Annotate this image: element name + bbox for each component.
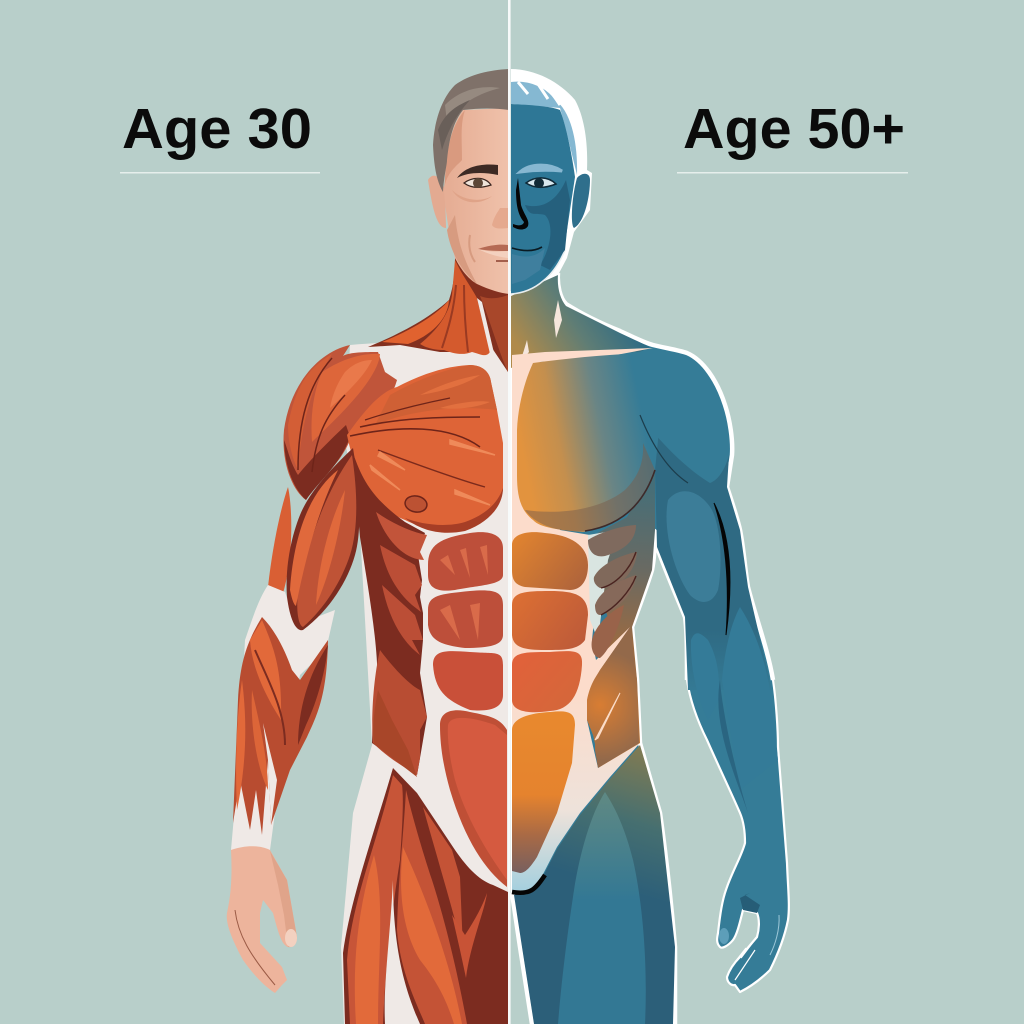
ab row 2 <box>428 590 503 648</box>
left under-eye shading <box>452 190 492 202</box>
right neck gradient <box>511 275 650 368</box>
right mouth line <box>512 247 542 251</box>
left cheek crease <box>469 235 475 262</box>
right ab row 3 <box>512 651 582 712</box>
right ear <box>572 174 590 228</box>
left face <box>444 108 509 294</box>
right ab row 4 <box>512 711 575 873</box>
right lower chest shadow <box>525 443 655 531</box>
left dark armpit and lat <box>352 450 427 775</box>
right lower oblique <box>587 627 639 768</box>
right eye <box>526 178 556 187</box>
right serratus muscles <box>588 525 637 658</box>
left neck muscles <box>368 258 508 372</box>
light fascia between serratus <box>588 530 618 640</box>
right half: blue figure <box>511 273 789 1024</box>
right hair <box>511 82 577 175</box>
ab row 3 <box>433 651 503 710</box>
right pectoral crease <box>585 470 655 531</box>
left rectus abdominis <box>428 532 507 887</box>
left half: anatomical muscle figure <box>227 258 508 1024</box>
center divider line <box>508 0 511 1024</box>
left head <box>428 69 509 294</box>
right thigh highlight <box>558 792 646 1024</box>
right head white outline <box>511 69 592 296</box>
left eye <box>464 178 491 187</box>
right arm and lat shade <box>633 407 772 690</box>
right eyebrow <box>520 165 562 172</box>
right abdomen <box>512 525 639 893</box>
left deltoid <box>284 345 397 500</box>
right neck slivers <box>520 300 562 362</box>
left serratus and oblique <box>372 512 427 777</box>
right chest <box>517 353 660 532</box>
right ab row 2 <box>512 591 588 650</box>
right hand details <box>740 893 760 913</box>
right head <box>511 69 592 296</box>
left forearm muscles <box>233 617 328 835</box>
left triceps sliver <box>268 487 291 593</box>
left mouth <box>478 245 508 251</box>
heading: Age 30: Age 30 <box>122 97 312 161</box>
right biceps <box>667 491 720 602</box>
left biceps <box>287 448 359 630</box>
right shoulder crease <box>640 415 688 483</box>
right forearm highlight <box>722 607 778 790</box>
right forearm shade line <box>718 680 748 813</box>
left eyebrow <box>457 165 498 178</box>
ab row 4 <box>440 710 507 887</box>
right face <box>511 104 575 294</box>
right nose black line <box>513 178 528 230</box>
left hand <box>227 846 297 993</box>
nipple <box>404 494 428 514</box>
left nose <box>492 208 508 229</box>
left arm fascia <box>231 585 335 850</box>
heading: Age 50+: Age 50+ <box>683 97 905 161</box>
left pectoral <box>347 365 503 533</box>
right thigh <box>514 745 675 1024</box>
right groin dark line <box>512 875 545 893</box>
right body silhouette <box>511 273 789 1024</box>
right fascia <box>512 348 653 893</box>
right ab row 1 <box>512 532 588 590</box>
right triceps line <box>714 503 730 635</box>
right side torso <box>585 470 655 768</box>
right face shading <box>525 180 570 270</box>
left thigh muscles <box>343 768 508 1024</box>
ab row 1 <box>428 532 503 591</box>
left hair <box>433 69 509 192</box>
oblique sliver <box>595 693 620 740</box>
right thick outline <box>512 273 773 1024</box>
left fascia base <box>341 340 508 1024</box>
left ear <box>428 176 446 228</box>
